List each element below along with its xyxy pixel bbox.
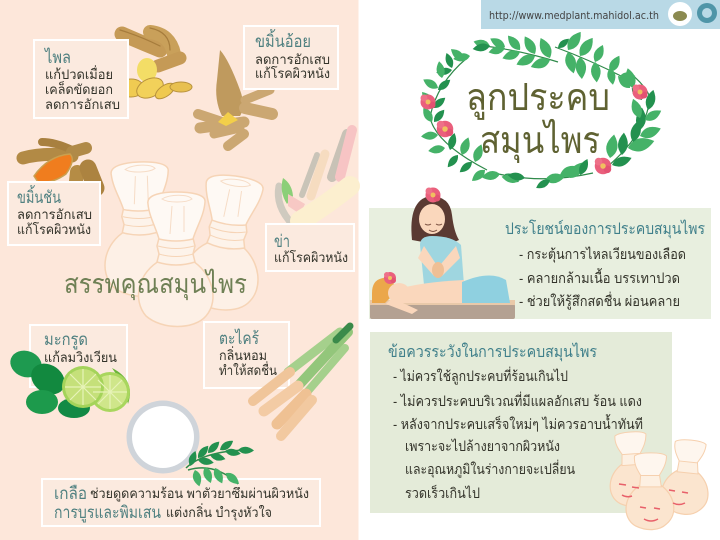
benefits list: - กระตุ้นการไหลเวียนของเลือด (519, 246, 686, 263)
left panel background (0, 0, 358, 540)
text box: khamin oi: แก้โรคผิวหนัง (255, 65, 330, 81)
icon: smiling compresses (606, 430, 714, 530)
icon: lemongrass (253, 326, 350, 436)
icon: plai ginger (118, 28, 192, 102)
text box: khamin chan (8, 182, 100, 245)
precautions list: - ไม่ควรใช้ลูกประคบที่ร้อนเกินไป (393, 367, 568, 385)
text box: plai: เคล็ดขัดยอก (45, 80, 113, 97)
text box: khamin chan: ลดการอักเสบ (17, 207, 92, 222)
heading: herb properties: สรรพคุณสมุนไพร (64, 269, 247, 301)
icon: salt bowl (126, 400, 200, 474)
text box: kha (266, 224, 354, 271)
precautions list: และอุณหภูมิในร่างกายจะเปลี่ยน (405, 460, 575, 478)
icon: university logo (697, 3, 717, 23)
text box: khamin chan: ขมิ้นชัน (17, 185, 61, 207)
title: ลูกประคบ (466, 77, 610, 120)
icon: cassumunar ginger (198, 50, 272, 146)
icon: medicinal plant logo (668, 2, 692, 26)
heading: precautions: ข้อควรระวังในการประคบสมุนไพร (388, 342, 597, 362)
benefits list: - คลายกล้ามเนื้อ บรรเทาปวด (519, 268, 680, 286)
text box: salt and camphor: ช่วยดูดความร้อน พาตัวยาซึมผ่านผิวหนัง (90, 486, 309, 502)
precautions list: - หลังจากประคบเสร็จใหม่ๆ ไม่ควรอาบน้ำทันที (393, 414, 643, 432)
icon: galangal (faded) (278, 130, 352, 228)
text box: salt and camphor: เกลือ (54, 484, 87, 503)
text box: salt and camphor: การบูรและพิมเสน (54, 503, 161, 523)
text box: plai (34, 40, 128, 118)
icon: herb sprig (186, 438, 254, 487)
illustration: herbal compresses (faded) (101, 161, 272, 326)
illustration: massage scene (370, 188, 515, 319)
precautions list: รวดเร็วเกินไป (405, 484, 480, 501)
text box: plai: ไพล (43, 47, 71, 67)
benefits list (519, 246, 686, 310)
icon: kaffir lime (7, 346, 130, 418)
text box: lemongrass (204, 322, 289, 388)
text box: kaffir lime (30, 325, 127, 387)
icon: wreath flowers (420, 84, 648, 174)
text box: salt and camphor: แต่งกลิ่น บำรุงหัวใจ (166, 503, 272, 521)
text box: lemongrass: กลิ่นหอม (219, 346, 267, 363)
precautions list: - ไม่ควรประคบบริเวณที่มีแผลอักเสบ ร้อน แดง (393, 392, 642, 409)
title: สมุนไพร (480, 119, 600, 163)
panel: precautions (370, 332, 672, 513)
url bar: http://www.medplant.mahidol.ac.th (489, 9, 659, 22)
text box: salt and camphor (42, 479, 320, 526)
text box: khamin oi: ลดการอักเสบ (255, 52, 330, 67)
text box: lemongrass: ตะไคร้ (219, 328, 259, 348)
text box: plai: แก้ปวดเมื่อย (45, 65, 113, 82)
precautions list (393, 367, 643, 501)
text box: khamin chan: แก้โรคผิวหนัง (17, 221, 91, 237)
text box: khamin oi: ขมิ้นอ้อย (255, 29, 311, 51)
url bar (481, 0, 720, 29)
benefits list: - ช่วยให้รู้สึกสดชื่น ผ่อนคลาย (519, 292, 680, 310)
text box: khamin oi (244, 26, 338, 89)
panel: benefits (369, 208, 711, 319)
precautions list: เพราะจะไปล้างยาจากผิวหนัง (405, 438, 560, 454)
text box: plai: ลดการอักเสบ (45, 97, 120, 112)
leaf wreath (419, 29, 663, 191)
text box: kaffir lime: มะกรูด (44, 330, 88, 350)
text box: kha: ข่า (274, 232, 290, 251)
icon: turmeric (23, 142, 96, 190)
text box: kha: แก้โรคผิวหนัง (274, 249, 348, 265)
text box: kaffir lime: แก้ลมวิงเวียน (44, 350, 117, 365)
text box: lemongrass: ทำให้สดชื่น (219, 361, 277, 378)
title (466, 77, 610, 163)
